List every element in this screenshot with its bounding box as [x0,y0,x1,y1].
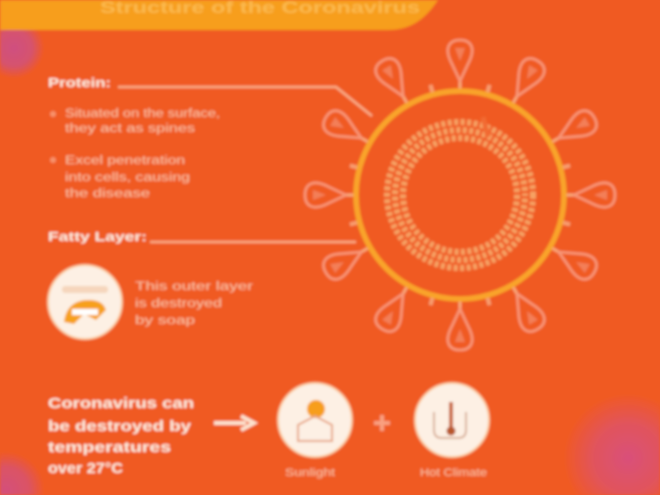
decoration: pink virus bottom right [564,394,660,495]
connector: fatty layer line [150,241,356,243]
label: hot climate: Hot Climate [420,467,487,479]
text: destruction statement [48,395,194,477]
spikes [305,40,615,350]
text: fatty layer description [135,281,253,327]
text: fatty layer description: This outer layer [135,281,253,293]
protein bullet points: they act as spines [65,123,195,135]
decoration: pink virus bottom left [0,452,44,495]
protein bullet points: into cells, causing [65,172,190,184]
beaded RNA ring [387,117,533,268]
text: fatty layer description: by soap [135,315,195,327]
label: sunlight: Sunlight [285,467,335,479]
heading: protein: Protein: [48,75,111,90]
text: fatty layer description: is destroyed [135,298,222,310]
plus sign [374,415,390,431]
outer membrane ring [356,91,564,299]
icon: sunlight [278,383,352,457]
protein bullet points: Excel penetration [65,155,185,167]
icon: hot climate [415,383,489,457]
text: destruction statement: over 27°C [48,460,123,477]
diagram: coronavirus [305,40,615,350]
text: destruction statement: Coronavirus can [48,395,194,412]
icon: soap and hands [48,265,122,339]
connector: protein line [118,87,372,116]
surface stubs [350,85,570,305]
heading: fatty layer: Fatty Layer: [48,229,147,244]
protein bullet points [50,108,220,200]
protein bullet points: the disease [65,188,150,200]
protein bullet points: Situated on the surface, [65,108,220,120]
arrow [214,416,254,430]
text: destruction statement: temperatures [48,439,171,456]
header band [0,0,438,30]
decoration: pink virus top left [0,20,44,80]
text: destruction statement: be destroyed by [48,418,192,435]
